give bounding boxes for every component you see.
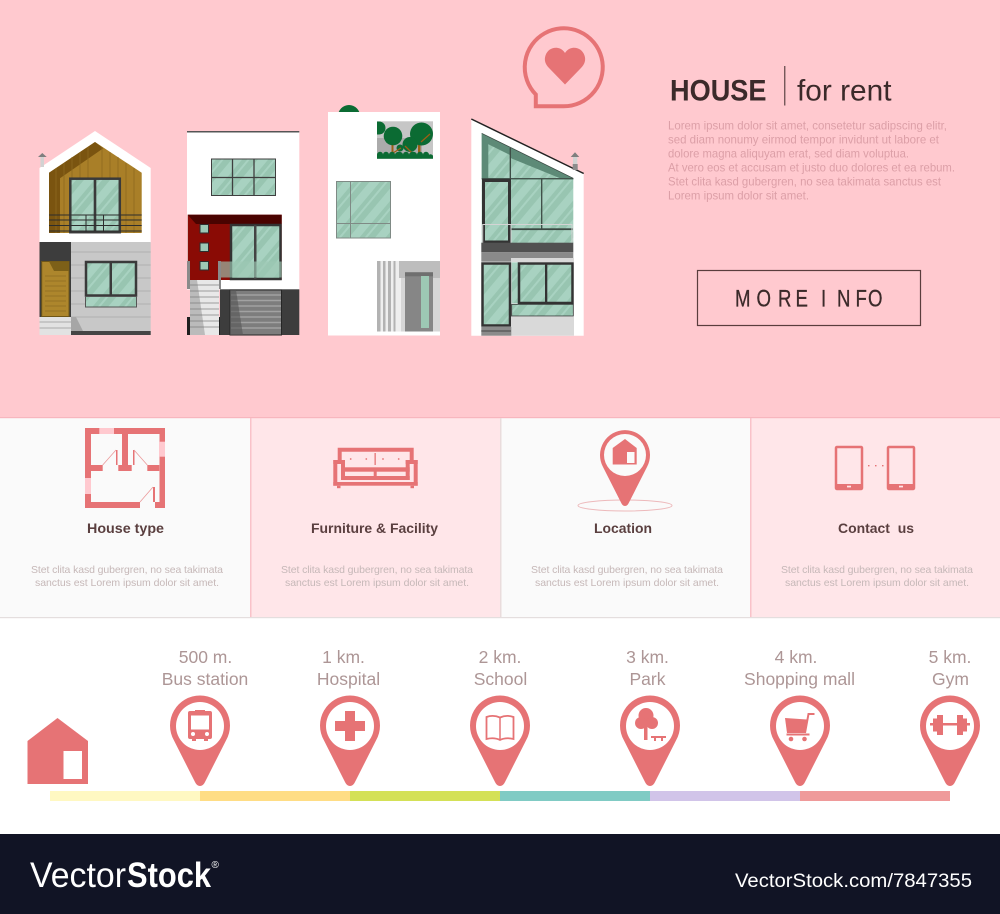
balcony rail xyxy=(483,224,572,243)
footer logo xyxy=(30,856,220,895)
intro text block: Lorem ipsum dolor sit amet. xyxy=(668,188,809,202)
icon: floor plan xyxy=(85,428,165,508)
pin: shopping mall xyxy=(770,696,830,786)
house 1: gabled wood house xyxy=(38,131,151,335)
card text: sanctus est Lorem ipsum dolor sit amet. xyxy=(35,577,219,589)
card text: sanctus est Lorem ipsum dolor sit amet. xyxy=(285,577,469,589)
card text xyxy=(781,564,973,589)
intro text block: dolore magna aliquyam erat, sed diam voluptua. xyxy=(668,146,909,160)
card heading: Location xyxy=(594,520,652,536)
button: more info xyxy=(698,270,920,326)
balcony rail xyxy=(218,262,282,278)
roof garden xyxy=(377,121,433,159)
icon: speech bubble with heart xyxy=(525,28,603,106)
chimney xyxy=(571,152,579,170)
panel: location xyxy=(500,418,750,618)
house 2: white and red modern house xyxy=(187,131,299,335)
footer logo: ® xyxy=(212,860,220,871)
footer bar xyxy=(0,834,1000,914)
footer image id: VectorStock.com/7847355 xyxy=(735,870,972,892)
card text: Stet clita kasd gubergren, no sea takimata xyxy=(781,564,973,576)
distance labels: 500 m. xyxy=(179,647,232,667)
lower window xyxy=(86,262,136,296)
panel: furniture and facility xyxy=(250,418,500,618)
card heading: Contact us xyxy=(838,520,914,536)
card text: sanctus est Lorem ipsum dolor sit amet. xyxy=(785,577,969,589)
distance labels: 1 km. xyxy=(322,647,365,667)
pin: hospital xyxy=(320,696,380,786)
pin: park xyxy=(620,696,680,786)
distance labels: 4 km. xyxy=(775,647,817,667)
pin: gym xyxy=(920,696,980,786)
hero background xyxy=(0,0,1000,418)
card text xyxy=(531,564,723,589)
base and garage xyxy=(220,289,299,335)
distance labels: Gym xyxy=(932,669,969,689)
distance labels: Park xyxy=(630,669,666,689)
pin: school xyxy=(470,696,530,786)
title: for rent xyxy=(797,75,892,108)
card text xyxy=(281,564,473,589)
card text: sanctus est Lorem ipsum dolor sit amet. xyxy=(535,577,719,589)
upper glazing xyxy=(482,133,573,243)
distance labels: Hospital xyxy=(317,669,380,689)
lower left window xyxy=(482,264,510,326)
intro text block: sed diam nonumy eirmod tempor invidunt ut labore et xyxy=(668,132,940,146)
distance colour bar xyxy=(50,791,950,801)
distance labels: Shopping mall xyxy=(744,669,855,689)
panel: contact us xyxy=(750,418,1000,618)
distance labels: 2 km. xyxy=(479,647,521,667)
panel: house type xyxy=(0,418,250,618)
footer logo: Stock xyxy=(127,856,211,895)
footer logo: Vector xyxy=(30,856,126,895)
lower right window xyxy=(512,262,518,303)
distance labels: 5 km. xyxy=(929,647,971,667)
button: more info: MORE INFO xyxy=(735,284,882,312)
distance labels: 3 km. xyxy=(626,647,669,667)
intro text block: Lorem ipsum dolor sit amet, consetetur sadipscing elitr, xyxy=(668,118,947,132)
distance labels xyxy=(162,647,971,689)
upper window xyxy=(212,159,276,196)
icon: sofa xyxy=(333,448,418,488)
card text: Stet clita kasd gubergren, no sea takimata xyxy=(281,564,473,576)
large window xyxy=(336,182,390,238)
chimney xyxy=(38,153,47,167)
intro text block: At vero eos et accusam et justo duo dolores et ea rebum. xyxy=(668,160,955,174)
distance labels: Bus station xyxy=(162,669,248,689)
intro text block xyxy=(668,118,955,202)
card heading: Furniture & Facility xyxy=(311,520,438,536)
card text: Stet clita kasd gubergren, no sea takimata xyxy=(31,564,223,576)
house 3: tall white house xyxy=(328,105,440,336)
upper balcony door xyxy=(70,179,120,232)
entry xyxy=(377,261,440,332)
title: HOUSE xyxy=(670,75,766,108)
card text: Stet clita kasd gubergren, no sea takimata xyxy=(531,564,723,576)
card heading: House type xyxy=(87,520,164,536)
red wall xyxy=(188,215,282,280)
pin: bus station xyxy=(170,696,230,786)
title xyxy=(670,66,892,108)
balcony door xyxy=(231,225,280,279)
stairs xyxy=(190,280,219,335)
distance labels: School xyxy=(474,669,527,689)
icon: two phones xyxy=(836,447,914,489)
card text xyxy=(31,564,223,589)
house 4: slanted roof house xyxy=(471,119,584,336)
icon: home start xyxy=(28,718,88,784)
icon: location pin xyxy=(578,430,672,511)
intro text block: Stet clita kasd gubergren, no sea takimata sanctus est xyxy=(668,174,942,188)
